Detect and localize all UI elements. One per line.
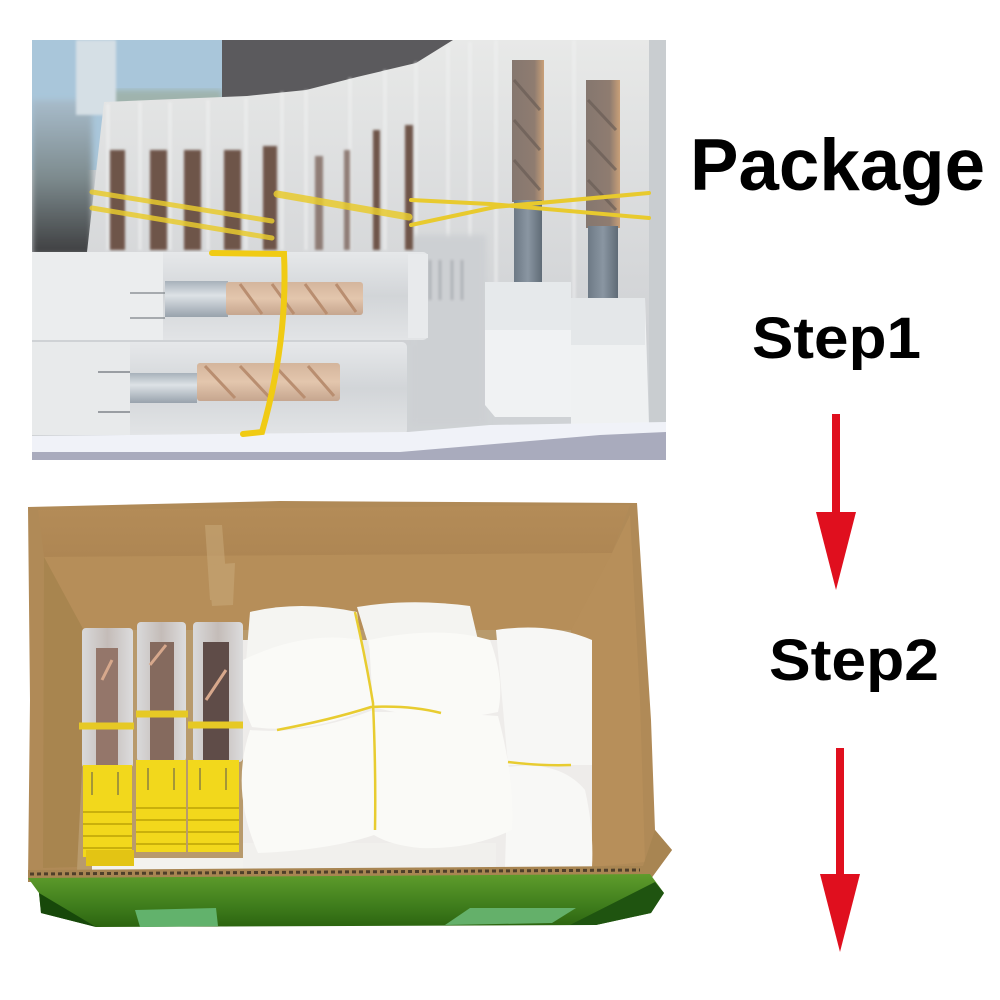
photo: cardboard box with packed tools	[28, 501, 672, 927]
background window and wall	[32, 40, 666, 460]
box floor	[77, 630, 592, 870]
left wall	[43, 557, 89, 868]
right wall	[571, 515, 645, 867]
back flap	[38, 505, 630, 557]
photo: transparent tool boxes	[32, 40, 666, 460]
horizontal boxes	[32, 252, 428, 435]
arrow: step 1 down	[816, 414, 856, 590]
heading: Package: Package	[690, 125, 985, 206]
three packaged end mills	[79, 622, 243, 866]
label: Step1: Step1	[752, 306, 921, 371]
tape reflection on back	[205, 525, 235, 606]
shelf	[32, 422, 666, 452]
yellow rubber bands	[92, 192, 649, 434]
box outer silhouette	[28, 501, 672, 880]
corrugated front edge	[28, 830, 672, 882]
back wall	[44, 553, 612, 640]
label: Step2: Step2	[769, 628, 939, 693]
upright end mills	[485, 60, 649, 425]
light green tape patches	[135, 908, 218, 927]
arrow: step 2 down	[820, 748, 860, 952]
green tape front	[28, 874, 664, 927]
back row of transparent boxes	[87, 40, 649, 300]
foam tie bands	[277, 612, 571, 830]
white foam bundles	[92, 602, 592, 872]
